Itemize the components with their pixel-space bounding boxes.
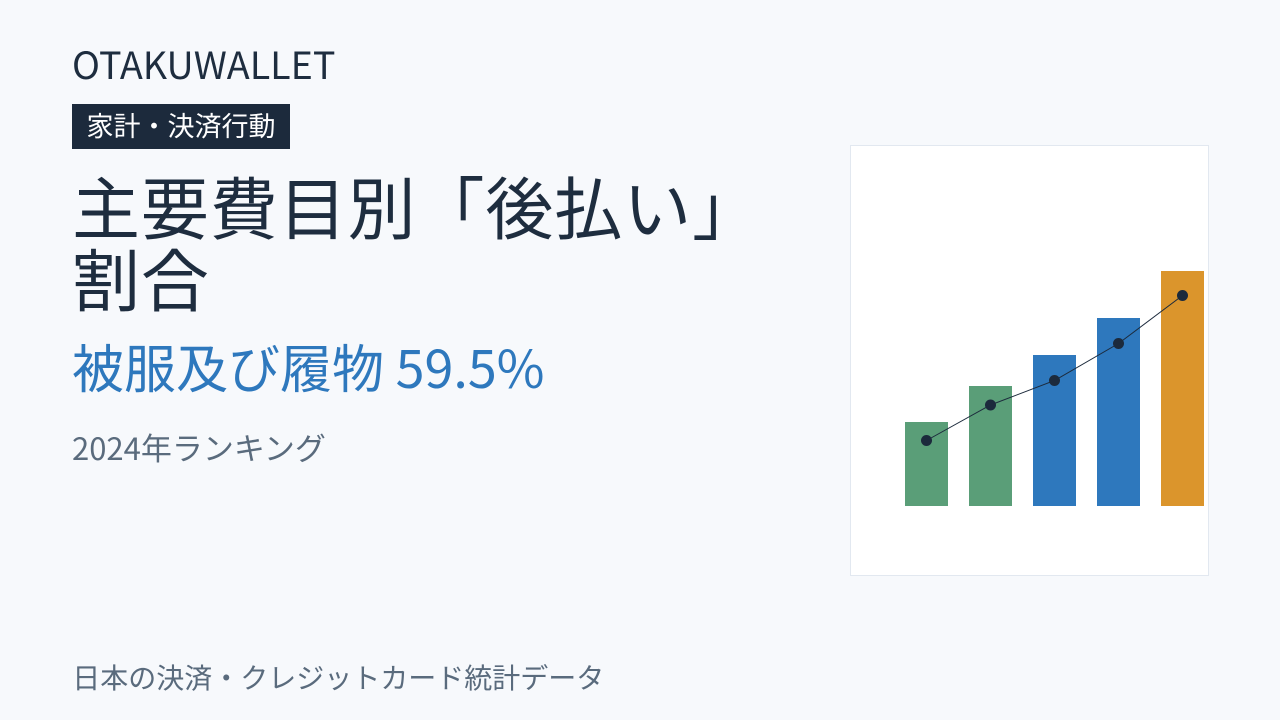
title: 主要費目別「後払い」 xyxy=(72,155,761,254)
footer source: 日本の決済・クレジットカード統計データ xyxy=(72,657,604,697)
category tag: 家計・決済行動 xyxy=(86,105,276,144)
panel: chart xyxy=(850,145,1209,576)
title xyxy=(72,155,761,326)
subtitle: year ranking: 2024年ランキング xyxy=(72,424,326,469)
trend line xyxy=(921,290,1188,446)
brand name: OTAKUWALLET xyxy=(72,35,335,90)
bar chart xyxy=(905,271,1204,506)
highlight value: 被服及び履物 59.5% xyxy=(72,328,545,403)
title: 割合 xyxy=(72,227,210,326)
